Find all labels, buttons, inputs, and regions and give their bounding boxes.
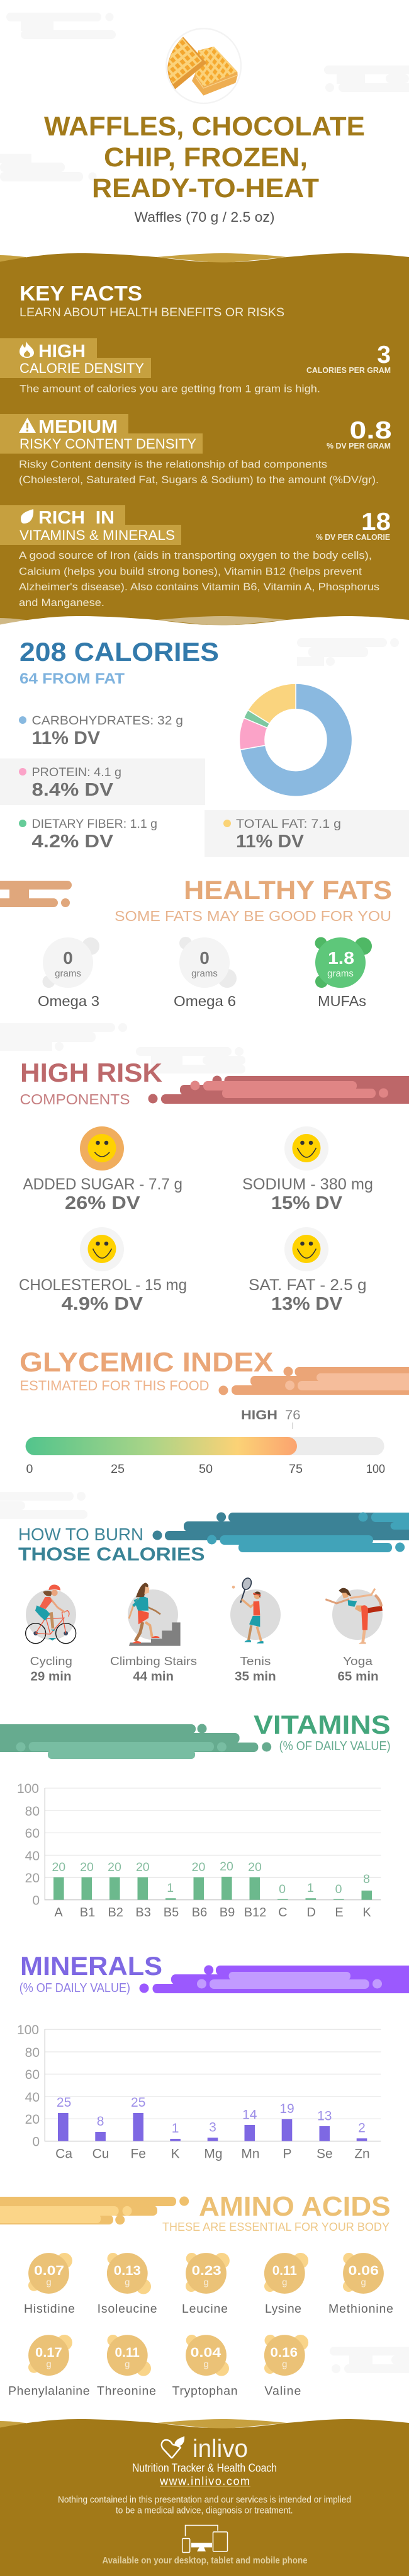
legend: carbohydrates	[19, 714, 183, 748]
bar chart: minerals: 25	[131, 2095, 145, 2110]
histidine: Histidine	[24, 2302, 75, 2316]
bar chart: minerals: Ca	[55, 2147, 72, 2161]
availability note: Available on your desktop, tablet and mobile phone	[102, 2556, 307, 2566]
fact: calorie density: CALORIE DENSITY	[20, 360, 144, 376]
added sugar: 26% DV	[65, 1193, 140, 1213]
bar chart: vitamins: 0	[279, 1882, 286, 1896]
panel: vitamins	[0, 1710, 391, 1920]
tagline: Nutrition Tracker & Health Coach	[132, 2462, 277, 2475]
omega 3: 0	[63, 948, 73, 968]
bar chart: vitamins: 20	[192, 1860, 205, 1874]
activity: yoga: Yoga	[343, 1655, 373, 1668]
subheading: from fat: 64 FROM FAT	[20, 670, 125, 687]
panel: healthy fats	[0, 875, 392, 1009]
bar chart: vitamins: D	[306, 1906, 316, 1920]
bar chart: minerals: Mg	[204, 2147, 223, 2161]
ornament	[0, 2196, 189, 2224]
panel: high risk components	[19, 1058, 409, 1314]
panel: calories	[0, 637, 409, 857]
phenylalanine	[8, 2335, 90, 2398]
title: CHIP, FROZEN,	[104, 142, 308, 173]
bar chart: minerals: Fe	[130, 2147, 146, 2161]
legend: carbohydrates: CARBOHYDRATES: 32 g	[31, 714, 183, 728]
methionine: g	[361, 2277, 366, 2288]
disclaimer	[58, 2495, 351, 2516]
panel: how to burn those calories	[18, 1512, 409, 1684]
gauge axis	[26, 1462, 385, 1476]
footer	[0, 2419, 409, 2576]
bar chart: vitamins: 60	[25, 1826, 40, 1841]
bar chart: minerals: 8	[97, 2114, 104, 2129]
fact: calorie density: CALORIES PER GRAM	[306, 365, 391, 375]
bar chart: vitamins: C	[278, 1906, 288, 1920]
bar chart: vitamins: 1	[167, 1881, 174, 1895]
bar chart: minerals: 0	[32, 2134, 40, 2150]
MUFAs: 1.8	[328, 948, 354, 968]
heading: glycemic index: GLYCEMIC INDEX	[20, 1347, 274, 1378]
omega 3	[38, 937, 99, 1009]
bar chart: vitamins	[17, 1782, 381, 1920]
valine: Valine	[264, 2384, 301, 2398]
icon: devices	[182, 2525, 228, 2553]
phenylalanine: Phenylalanine	[8, 2384, 90, 2398]
fact: risky content density: 0.8	[350, 417, 391, 444]
subheading: COMPONENTS	[20, 1091, 130, 1108]
activity: climbing stairs: 44 min	[133, 1670, 174, 1684]
bar chart: vitamins: 1	[307, 1881, 314, 1895]
omega 6	[174, 937, 237, 1009]
threonine: 0.11	[115, 2345, 140, 2360]
fact: rich in vitamins and minerals: and Manganese.	[19, 597, 104, 609]
fact: rich in vitamins and minerals: Alzheimer's disease). Also contains Vitamin B6, Vitamin A, Phosphorus	[19, 581, 379, 593]
icon: leaf	[21, 509, 33, 524]
fact: risky content density: Risky Content density is the relationship of bad components	[19, 459, 327, 471]
legend: dietary fiber: 4.2% DV	[31, 832, 114, 852]
leucine: 0.23	[192, 2264, 221, 2278]
MUFAs: grams	[327, 968, 354, 979]
panel: glycemic index	[20, 1347, 409, 1476]
bar chart: vitamins: B12	[244, 1906, 266, 1920]
histidine	[24, 2253, 75, 2316]
bar chart: minerals: 3	[209, 2120, 216, 2134]
activity: yoga	[325, 1588, 383, 1684]
bar chart: vitamins: E	[335, 1906, 344, 1920]
bar chart: vitamins: 20	[80, 1860, 94, 1874]
panel: how to burn those calories: THOSE CALORIES	[18, 1544, 205, 1565]
food image: waffles	[166, 28, 241, 103]
gauge axis: 100	[366, 1462, 385, 1476]
lysine	[264, 2253, 308, 2316]
bar chart: vitamins: B6	[192, 1906, 207, 1920]
bar chart: vitamins: 20	[220, 1860, 233, 1874]
legend: total fat: TOTAL FAT: 7.1 g	[236, 817, 341, 831]
histidine: g	[46, 2277, 52, 2288]
ornament	[152, 1512, 409, 1552]
activity: cycling: 29 min	[30, 1670, 72, 1684]
bar chart: minerals: 14	[242, 2107, 257, 2122]
bar chart: vitamins: B5	[164, 1906, 179, 1920]
activity: tennis	[230, 1577, 281, 1684]
threonine: g	[125, 2359, 130, 2370]
bar chart: minerals: P	[283, 2147, 292, 2161]
methionine: 0.06	[349, 2264, 379, 2278]
icon: flame	[20, 341, 34, 358]
fact: calorie density: 3	[377, 341, 391, 369]
activity: tennis: 35 min	[235, 1670, 276, 1684]
cholesterol: CHOLESTEROL - 15 mg	[19, 1276, 187, 1294]
panel: minerals	[17, 1951, 409, 2161]
lysine: Lysine	[265, 2302, 301, 2316]
gauge label: HIGH	[241, 1408, 277, 1423]
bar chart: vitamins: 100	[17, 1782, 39, 1796]
isoleucine	[98, 2253, 157, 2316]
legend: protein: 8.4% DV	[31, 780, 114, 800]
isoleucine: 0.13	[114, 2264, 141, 2278]
website: www.inlivo.com	[159, 2475, 250, 2487]
gauge axis: 75	[289, 1462, 303, 1476]
legend: protein: PROTEIN: 4.1 g	[31, 765, 121, 779]
added sugar	[23, 1126, 182, 1213]
bar chart: minerals: Cu	[92, 2147, 109, 2161]
omega 6: 0	[199, 948, 210, 968]
legend: carbohydrates: 11% DV	[31, 728, 101, 748]
bar chart: vitamins: 0	[335, 1882, 342, 1896]
methionine	[328, 2253, 393, 2316]
omega 6: Omega 6	[174, 993, 236, 1009]
cholesterol: 4.9% DV	[62, 1294, 143, 1314]
subheading: (% OF DAILY VALUE)	[20, 1981, 130, 1995]
title: READY-TO-HEAT	[92, 173, 319, 203]
bar chart: minerals	[17, 2023, 381, 2161]
bar chart: minerals: 20	[25, 2112, 40, 2127]
title: WAFFLES, CHOCOLATE	[44, 112, 365, 142]
fact: rich in vitamins and minerals	[0, 505, 391, 609]
icon: tennis player	[232, 1577, 264, 1644]
icon: yoga pose	[325, 1588, 382, 1644]
donut chart	[239, 684, 352, 796]
omega 3: grams	[55, 968, 81, 979]
leucine: g	[203, 2277, 209, 2288]
fact: calorie density: The amount of calories you are getting from 1 gram is high.	[20, 384, 320, 395]
activity: climbing stairs: Climbing Stairs	[110, 1655, 197, 1668]
isoleucine: g	[125, 2277, 130, 2288]
activity: cycling: Cycling	[30, 1655, 72, 1668]
panel: key facts	[0, 253, 409, 634]
sodium	[242, 1126, 373, 1213]
fact: rich in vitamins and minerals: A good source of Iron (aids in transporting oxygen to the body cells),	[19, 550, 372, 561]
activity: climbing stairs	[110, 1583, 197, 1684]
activity: yoga: 65 min	[337, 1670, 379, 1684]
leucine	[182, 2253, 230, 2316]
gauge axis: 50	[199, 1462, 213, 1476]
sodium: 15% DV	[271, 1193, 343, 1213]
isoleucine: Isoleucine	[98, 2302, 157, 2316]
ornament	[0, 881, 72, 907]
bar chart: minerals: 2	[358, 2121, 366, 2135]
bar chart: vitamins: 20	[52, 1860, 65, 1874]
disclaimer: to be a medical advice, diagnosis or treatment.	[116, 2505, 293, 2516]
bar chart: vitamins: B9	[220, 1906, 235, 1920]
bar chart: vitamins: 20	[136, 1860, 150, 1874]
heading: healthy fats: HEALTHY FATS	[184, 875, 392, 905]
phenylalanine: g	[46, 2359, 52, 2370]
bar chart: vitamins: B3	[135, 1906, 151, 1920]
bar chart: vitamins: K	[362, 1906, 371, 1920]
serving size: Waffles (70 g / 2.5 oz)	[135, 209, 274, 225]
fact: risky content density: MEDIUM	[38, 417, 118, 437]
heading: calories: 208 CALORIES	[20, 637, 219, 667]
bar chart: minerals: 40	[25, 2090, 40, 2105]
legend: total fat: 11% DV	[236, 832, 305, 852]
bar chart: vitamins: 80	[25, 1804, 40, 1819]
gauge label	[241, 1408, 301, 1429]
added sugar: ADDED SUGAR - 7.7 g	[23, 1176, 182, 1193]
methionine: Methionine	[328, 2302, 393, 2316]
bar chart: vitamins: 40	[25, 1849, 40, 1863]
gauge label: 76	[285, 1408, 301, 1423]
omega 3: Omega 3	[38, 993, 99, 1009]
tryptophan	[172, 2335, 238, 2398]
saturated fat: SAT. FAT - 2.5 g	[249, 1276, 366, 1294]
fact: rich in vitamins and minerals: RICH IN	[38, 508, 115, 528]
threonine	[97, 2335, 156, 2398]
tryptophan: 0.04	[191, 2345, 221, 2360]
subheading: THESE ARE ESSENTIAL FOR YOUR BODY	[162, 2220, 389, 2233]
icon: logo heart	[162, 2436, 184, 2458]
sodium: SODIUM - 380 mg	[242, 1176, 373, 1193]
disclaimer: Nothing contained in this presentation and our services is intended or implied	[58, 2495, 351, 2505]
legend: dietary fiber: DIETARY FIBER: 1.1 g	[31, 817, 157, 831]
valine	[264, 2335, 308, 2398]
MUFAs	[315, 937, 372, 1009]
fact: rich in vitamins and minerals: VITAMINS & MINERALS	[20, 527, 175, 543]
subheading: (% OF DAILY VALUE)	[279, 1739, 391, 1753]
fact: calorie density	[0, 338, 391, 395]
gauge axis: 0	[26, 1462, 33, 1476]
bar chart: minerals: 13	[317, 2109, 332, 2123]
histidine: 0.07	[34, 2264, 64, 2278]
ornament	[148, 1076, 409, 1104]
tryptophan: g	[203, 2359, 209, 2370]
ornament	[0, 1724, 271, 1759]
bar chart: vitamins: 20	[25, 1871, 40, 1886]
legend: dietary fiber	[19, 817, 157, 852]
bar chart: vitamins: A	[54, 1906, 63, 1920]
subheading: LEARN ABOUT HEALTH BENEFITS OR RISKS	[20, 306, 284, 319]
heading: vitamins: VITAMINS	[254, 1710, 391, 1739]
bar chart: vitamins: B1	[80, 1906, 95, 1920]
lysine: g	[282, 2277, 287, 2288]
MUFAs: MUFAs	[318, 993, 366, 1009]
valine: g	[282, 2359, 287, 2370]
icon: stair climber	[129, 1583, 181, 1646]
icon: warning triangle	[19, 418, 36, 433]
omega 6: grams	[191, 968, 218, 979]
heading: high risk: HIGH RISK	[20, 1058, 162, 1087]
valine: 0.16	[271, 2345, 298, 2360]
gauge axis: 25	[111, 1462, 125, 1476]
logo wordmark: inlivo	[193, 2435, 248, 2463]
bar chart: vitamins: 0	[32, 1894, 40, 1908]
saturated fat	[249, 1227, 366, 1314]
fact: risky content density	[0, 414, 391, 486]
bar chart: minerals: Mn	[241, 2147, 260, 2161]
heading: HOW TO BURN	[18, 1525, 143, 1544]
bar chart: minerals: K	[171, 2147, 180, 2161]
fact: rich in vitamins and minerals: % DV PER CALORIE	[316, 532, 390, 542]
heading: key facts: KEY FACTS	[20, 282, 142, 305]
fact: risky content density: % DV PER GRAM	[327, 441, 391, 450]
icon: cyclist	[26, 1584, 76, 1644]
leucine: Leucine	[182, 2302, 228, 2316]
bar chart: minerals: 25	[57, 2095, 71, 2110]
bar chart: vitamins: 20	[248, 1860, 262, 1874]
fact: risky content density: (Cholesterol, Saturated Fat, Sugars & Sodium) to the amount (%DV/gr).	[19, 474, 379, 486]
legend: protein	[0, 758, 205, 805]
bar chart: minerals: 1	[172, 2121, 179, 2136]
bar chart: minerals: 60	[25, 2068, 40, 2082]
bar chart: minerals: 19	[279, 2102, 294, 2116]
bar chart: vitamins: B2	[108, 1906, 123, 1920]
activity: cycling	[26, 1584, 76, 1684]
cholesterol	[19, 1227, 187, 1314]
fact: risky content density: RISKY CONTENT DENSITY	[20, 436, 196, 452]
lysine: 0.11	[272, 2264, 297, 2278]
bar chart: vitamins: 20	[108, 1860, 121, 1874]
heading: amino acids: AMINO ACIDS	[199, 2191, 391, 2222]
subheading: ESTIMATED FOR THIS FOOD	[20, 1378, 209, 1394]
panel: amino acids	[0, 2191, 393, 2398]
ornament	[219, 1367, 409, 1395]
bar chart: minerals: 80	[25, 2046, 40, 2060]
saturated fat: 13% DV	[271, 1294, 343, 1314]
fact: rich in vitamins and minerals: Calcium (helps you build strong bones), Vitamin B12 (helps prevent	[19, 566, 362, 577]
bar chart: minerals: Zn	[354, 2147, 370, 2161]
title	[44, 112, 365, 203]
fact: rich in vitamins and minerals: 18	[361, 508, 391, 535]
phenylalanine: 0.17	[35, 2345, 62, 2360]
ornament	[140, 1966, 409, 1993]
heading: minerals: MINERALS	[20, 1951, 162, 1981]
bar chart: minerals: 100	[17, 2023, 39, 2037]
activity: tennis: Tenis	[240, 1655, 271, 1668]
legend: total fat	[204, 810, 409, 857]
fact: calorie density: HIGH	[38, 341, 86, 362]
bar chart: vitamins: 8	[363, 1872, 370, 1886]
gauge bar	[26, 1437, 384, 1455]
threonine: Threonine	[97, 2384, 156, 2398]
tryptophan: Tryptophan	[172, 2384, 238, 2398]
bar chart: minerals: Se	[317, 2147, 333, 2161]
subheading: SOME FATS MAY BE GOOD FOR YOU	[115, 908, 391, 924]
